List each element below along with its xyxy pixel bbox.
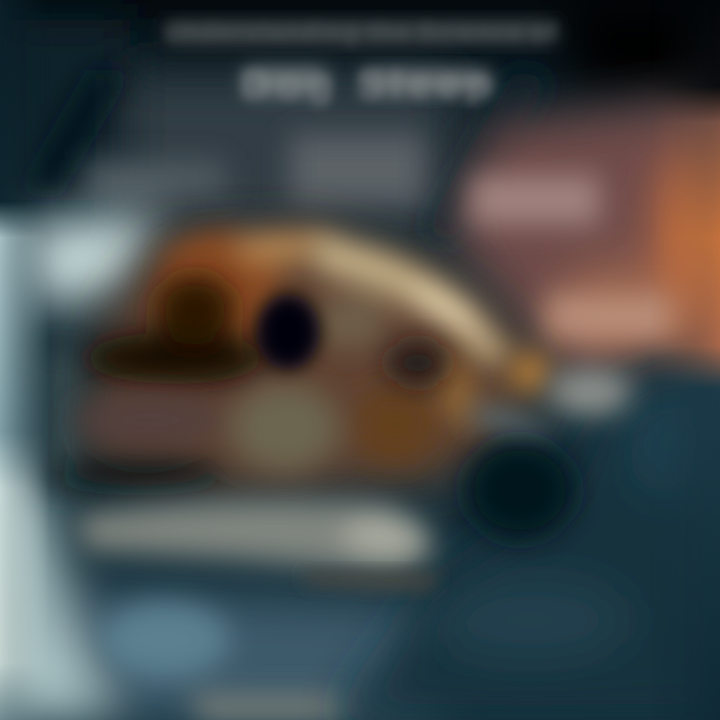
bedding: pale left blanket: [0, 210, 440, 720]
frame edge: right glow tones: [662, 66, 720, 720]
title: [165, 19, 557, 107]
dog: eye: [388, 343, 448, 383]
background: warm orange glow: [450, 95, 720, 385]
dog: dark brown shading: [85, 275, 265, 384]
title: subtitle line: Understanding the Science of: [166, 19, 557, 46]
dog: black ear patch: [256, 294, 320, 370]
dog: lower chest: [55, 383, 437, 486]
title: main heading: Dog Sleep: [241, 63, 491, 107]
dog: body and head: [55, 230, 550, 490]
dog: golden ear tip: [440, 350, 550, 430]
bedding: dark teal blanket: [340, 370, 720, 720]
frame edge: left blanket tones: [0, 0, 50, 720]
panel: blurred info cards: [85, 135, 680, 339]
dog: rust fur on back: [150, 231, 335, 350]
dog: cream fur highlight: [310, 235, 515, 362]
dog: paw over blanket: [75, 499, 440, 590]
dog: pale ruff and dark nose: [464, 368, 632, 540]
